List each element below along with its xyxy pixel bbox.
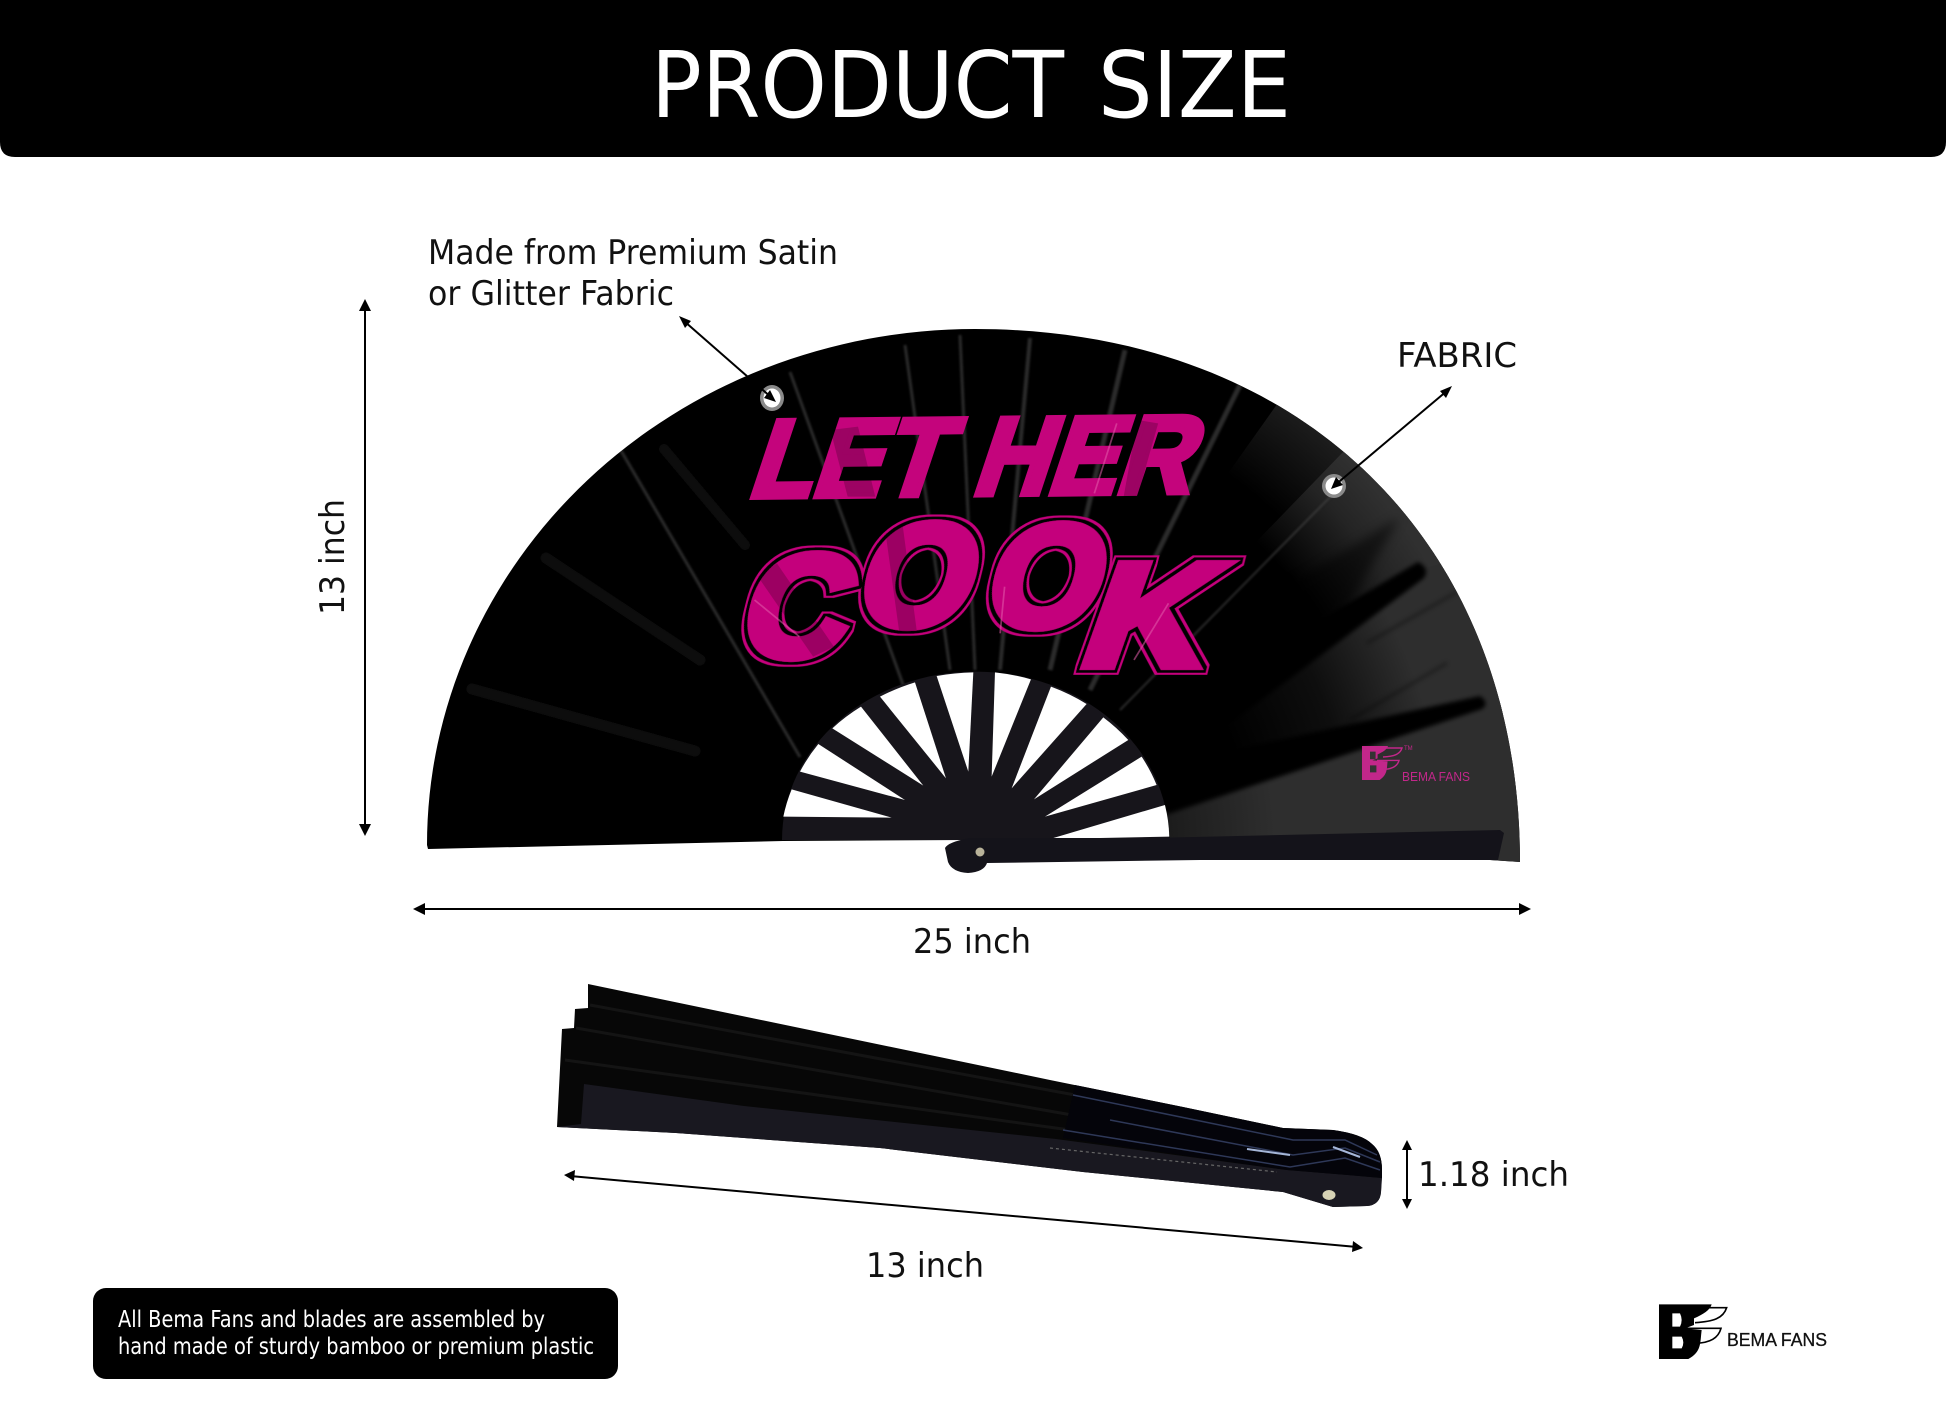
slogan: COOK: O xyxy=(845,495,998,657)
note box xyxy=(93,1288,618,1379)
closed fan illustration xyxy=(557,984,1382,1207)
dimension: height 13 inch xyxy=(313,299,371,836)
slogan: COOK: O xyxy=(973,496,1126,658)
dimension: thickness 1.18 inch xyxy=(1402,1140,1569,1209)
eyelet left xyxy=(760,385,784,411)
label: fabric material: or Glitter Fabric xyxy=(428,274,674,314)
note box: All Bema Fans and blades are assembled by xyxy=(118,1307,545,1333)
title: PRODUCT xyxy=(651,32,1065,139)
eyelet right xyxy=(1322,474,1346,498)
note box: hand made of sturdy bamboo or premium plastic xyxy=(118,1334,594,1360)
bema fans mark on fabric xyxy=(1362,746,1470,784)
bema fans mark on fabric: TM xyxy=(1404,746,1413,752)
closed fan ribs xyxy=(1050,1085,1382,1200)
pleat shading on slogan xyxy=(754,420,1168,660)
arrow: fabric material xyxy=(679,316,776,402)
closed fan guard stick xyxy=(557,1084,1382,1207)
dimension: width 25 inch xyxy=(413,903,1531,962)
arrow: FABRIC xyxy=(1331,386,1452,489)
bema fans mark on fabric: BEMA FANS xyxy=(1402,769,1470,784)
label: FABRIC: FABRIC xyxy=(1397,336,1517,376)
slogan: COOK: C xyxy=(728,526,873,688)
dimension: height 13 inch: 13 inch xyxy=(313,499,353,615)
label: fabric material: Made from Premium Satin xyxy=(428,233,838,273)
label: fabric material xyxy=(428,233,838,314)
slogan: COOK xyxy=(726,495,1251,696)
brand logo: BEMA FANS xyxy=(1727,1329,1827,1350)
header banner xyxy=(0,0,1946,157)
slogan: COOK: K xyxy=(1065,533,1242,696)
dimension: thickness 1.18 inch: 1.18 inch xyxy=(1418,1155,1569,1195)
dimension: width 25 inch: 25 inch xyxy=(913,922,1031,962)
slogan: LET HER: LET HER xyxy=(738,393,1221,520)
fan guard stick and pivot xyxy=(945,830,1504,873)
brand logo xyxy=(1659,1304,1827,1359)
icon: BF wing mark xyxy=(1659,1304,1727,1359)
fabric pleat highlights xyxy=(620,335,1337,757)
closed fan pleats xyxy=(565,1005,1075,1130)
closed fan fabric xyxy=(557,984,1382,1207)
fan centre cut-out with ribs xyxy=(782,672,1169,840)
dimension: closed length 13 inch xyxy=(564,1170,1363,1286)
open fan illustration xyxy=(400,320,1560,880)
dimension: closed length 13 inch: 13 inch xyxy=(866,1246,984,1286)
fan fabric xyxy=(427,329,1520,862)
title: SIZE xyxy=(1098,32,1291,139)
